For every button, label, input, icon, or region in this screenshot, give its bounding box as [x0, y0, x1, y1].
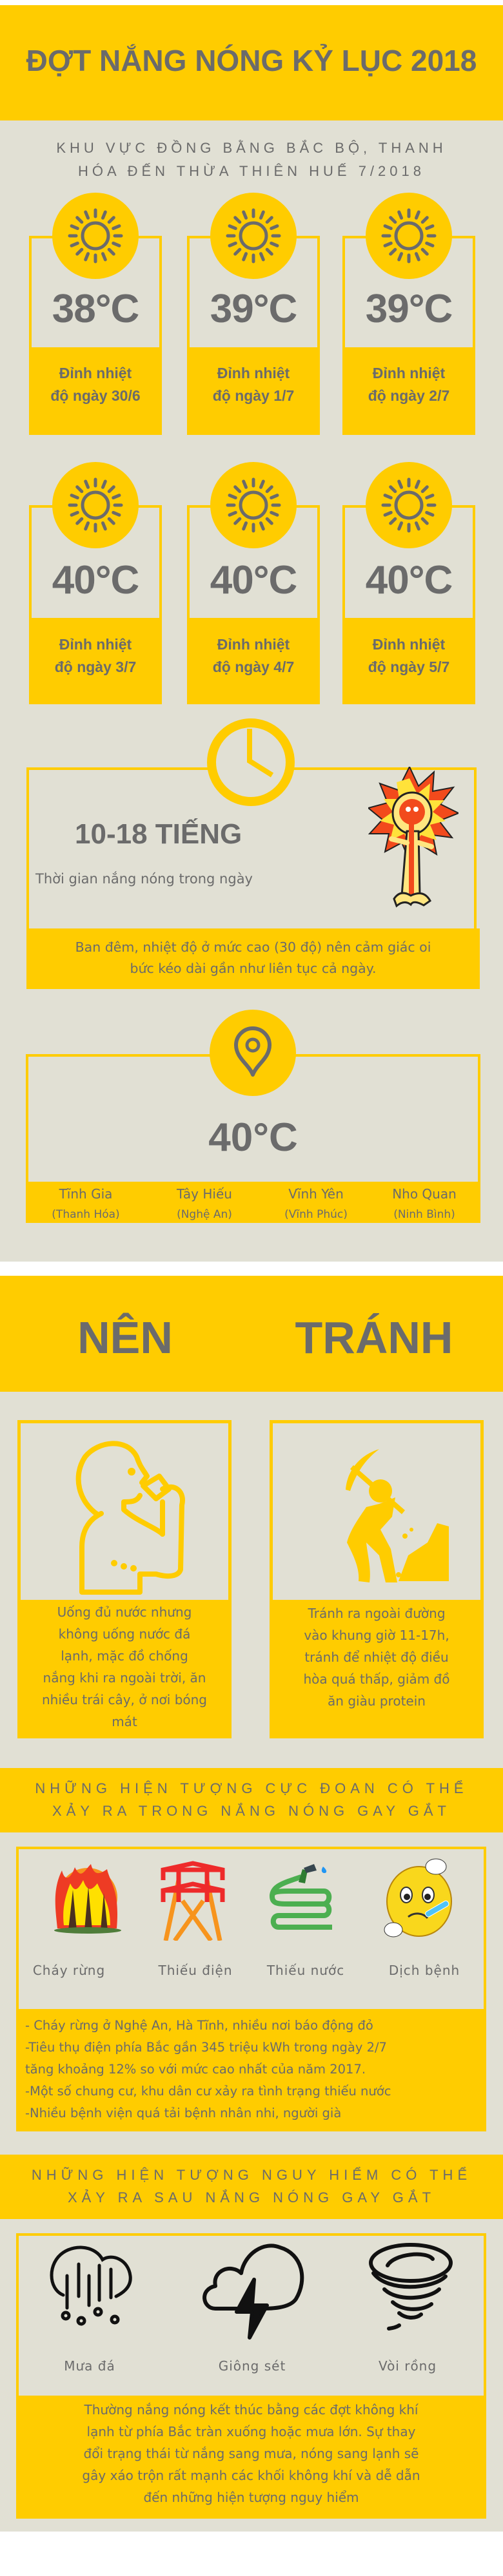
text: do advice: không uống nước đá	[59, 1626, 190, 1642]
banner: nên / tránh	[0, 1276, 503, 1392]
illustration: hot thermometer	[368, 767, 459, 907]
icon: thunderstorm	[202, 2244, 304, 2340]
card: 4/7	[187, 462, 320, 704]
heading: XẢY RA SAU NẮNG NÓNG GAY GẮT	[68, 2189, 435, 2206]
text: do advice	[17, 1600, 232, 1738]
labels: phenomena: Dịch bệnh	[389, 1963, 460, 1978]
places list: (Vĩnh Phúc)	[284, 1208, 348, 1221]
icon: forest fire	[54, 1864, 121, 1934]
text: avoid advice: Tránh ra ngoài đường	[308, 1606, 446, 1621]
label: Đỉnh nhiệt	[373, 636, 445, 653]
label: độ ngày 1/7	[213, 387, 294, 404]
banner: dangerous phenomena	[0, 2155, 503, 2219]
label: Đỉnh nhiệt	[373, 365, 445, 381]
heading: tránh: TRÁNH	[295, 1312, 453, 1363]
grey section 2	[0, 1392, 503, 2532]
label: độ ngày 3/7	[55, 658, 136, 675]
panel: sunshine hours	[26, 718, 480, 989]
icon: sun	[210, 462, 297, 548]
labels: phenomena: Thiếu điện	[158, 1963, 233, 1978]
text: facts: tăng khoảng 12% so với mức cao nhất của năm 2017.	[25, 2062, 366, 2077]
label: Đỉnh nhiệt	[59, 636, 132, 653]
temperature: 39°C	[210, 287, 297, 331]
icon: sun	[366, 193, 452, 279]
label: độ ngày 5/7	[368, 658, 449, 675]
text: do advice: nắng khi ra ngoài trời, ăn	[43, 1670, 206, 1686]
heading	[35, 1780, 468, 1819]
text: explanation: Thường nắng nóng kết thúc bằng các đợt không khí	[84, 2402, 418, 2417]
icon: clock	[207, 718, 295, 806]
text: do advice: lạnh, mặc đồ chống	[61, 1648, 188, 1664]
text: explanation	[16, 2396, 486, 2519]
heading: NHỮNG HIỆN TƯỢNG CỰC ĐOAN CÓ THỂ	[35, 1780, 468, 1796]
labels: phenomena	[33, 1963, 460, 1978]
places list: (Nghệ An)	[177, 1208, 232, 1221]
subtitle	[56, 140, 447, 179]
labels: dangers: Vòi rồng	[379, 2358, 437, 2374]
temperature: 40°C	[366, 558, 452, 602]
text: facts: -Một số chung cư, khu dân cư xảy ra tình trạng thiếu nước	[25, 2084, 391, 2099]
label: Đỉnh nhiệt	[217, 365, 290, 381]
icon: sun	[52, 462, 139, 548]
label: Đỉnh nhiệt	[59, 365, 132, 381]
subtitle: KHU VỰC ĐỒNG BẰNG BẮC BỘ, THANH	[56, 140, 447, 156]
heading	[32, 2166, 471, 2206]
text: avoid advice: hòa quá thấp, giảm đồ	[303, 1671, 449, 1687]
label	[213, 636, 294, 675]
icon: location pin	[210, 1010, 296, 1096]
temperature: 38°C	[52, 287, 139, 331]
panel: avoid	[270, 1420, 484, 1738]
labels: dangers: Giông sét	[219, 2358, 286, 2374]
title: ĐỢT NẮNG NÓNG KỶ LỤC 2018	[26, 44, 477, 77]
callout: night temperature	[26, 928, 480, 989]
text: avoid advice	[270, 1600, 484, 1738]
header banner	[0, 5, 503, 120]
icon: power tower	[161, 1861, 224, 1941]
grey section background	[0, 120, 503, 1262]
panel: do	[17, 1420, 232, 1738]
banner: extreme phenomena	[0, 1768, 503, 1832]
icon: drinking man	[76, 1441, 185, 1595]
callout: night temperature: bức kéo dài gần như liên tục cả ngày.	[130, 961, 376, 976]
panel: extreme phenomena	[16, 1847, 486, 2131]
text: avoid advice: tránh để nhiệt độ điều	[304, 1649, 449, 1665]
temperature: 39°C	[366, 287, 452, 331]
text: do advice: Uống đủ nước nhưng	[57, 1604, 192, 1620]
label	[368, 636, 449, 675]
places list	[26, 1182, 480, 1223]
heading: 10-18 tiếng: 10-18 TIẾNG	[75, 818, 242, 850]
label	[368, 365, 449, 404]
text: explanation: đến những hiện tượng nguy hiểm	[143, 2490, 359, 2505]
heading: NHỮNG HIỆN TƯỢNG NGUY HIỂM CÓ THỂ	[32, 2167, 471, 2183]
label: độ ngày 4/7	[213, 658, 294, 675]
labels: phenomena: Cháy rừng	[33, 1963, 105, 1978]
places list: Nho Quan	[392, 1186, 457, 1202]
card: 1/7	[187, 193, 320, 435]
label	[213, 365, 294, 404]
text: do advice: mát	[112, 1714, 137, 1729]
panel: hottest places	[26, 1010, 480, 1223]
places list: (Thanh Hóa)	[52, 1208, 120, 1221]
text: time description: Thời gian nắng nóng trong ngày	[35, 871, 253, 887]
heading: nên: NÊN	[77, 1312, 173, 1363]
icon: water hose	[270, 1864, 332, 1930]
temperature: 40°C	[52, 558, 139, 602]
card: 30/6	[29, 193, 162, 435]
card: 2/7	[342, 193, 475, 435]
text: explanation: gây xáo trộn rất mạnh các khối không khí và dễ dẫn	[82, 2468, 420, 2483]
places list: (Ninh Bình)	[393, 1208, 455, 1221]
label: độ ngày 2/7	[368, 387, 449, 404]
labels: phenomena: Thiếu nước	[267, 1963, 344, 1978]
text: facts	[16, 2009, 486, 2131]
subtitle: HÓA ĐẾN THỪA THIÊN HUẾ 7/2018	[78, 163, 425, 179]
label: Đỉnh nhiệt	[217, 636, 290, 653]
labels: dangers	[64, 2358, 437, 2374]
label: độ ngày 30/6	[50, 387, 141, 404]
text: facts: -Tiêu thụ điện phía Bắc gần 345 triệu kWh trong ngày 2/7	[25, 2040, 387, 2055]
icon: sun	[366, 462, 452, 548]
text: facts: - Cháy rừng ở Nghệ An, Hà Tĩnh, nhiều nơi báo động đỏ	[25, 2018, 373, 2033]
text: avoid advice: ăn giàu protein	[328, 1693, 426, 1709]
card: 5/7	[342, 462, 475, 704]
labels: dangers: Mưa đá	[64, 2358, 115, 2374]
icon: tornado	[369, 2243, 453, 2331]
icon: hail	[50, 2246, 132, 2326]
text: facts: -Nhiều bệnh viện quá tải bệnh nhân nhi, người già	[25, 2106, 341, 2120]
card: 3/7	[29, 462, 162, 704]
places list: Tây Hiếu	[177, 1186, 232, 1202]
label	[50, 365, 141, 404]
icon: sick emoji	[384, 1858, 452, 1937]
places list: Vĩnh Yên	[288, 1186, 344, 1202]
label	[55, 636, 136, 675]
panel: after heatwave	[16, 2233, 486, 2519]
places list: Tĩnh Gia	[59, 1186, 112, 1202]
heading: XẢY RA TRONG NẮNG NÓNG GAY GẮT	[52, 1803, 451, 1819]
icon: sun	[210, 193, 297, 279]
callout: night temperature: Ban đêm, nhiệt độ ở mức cao (30 độ) nên cảm giác oi	[75, 939, 431, 955]
text: do advice: nhiều trái cây, ở nơi bóng	[42, 1692, 207, 1707]
temperature: 40°C	[210, 558, 297, 602]
icon: digging worker	[346, 1449, 449, 1582]
icon: sun	[52, 193, 139, 279]
text: explanation: lạnh từ phía Bắc tràn xuống hoặc mưa lớn. Sự thay	[87, 2424, 415, 2439]
text: explanation: đổi trạng thái từ nắng sang mưa, nóng sang lạnh sẽ	[84, 2446, 419, 2461]
temperature: 40°C	[208, 1115, 298, 1160]
text: avoid advice: vào khung giờ 11-17h,	[304, 1628, 449, 1643]
